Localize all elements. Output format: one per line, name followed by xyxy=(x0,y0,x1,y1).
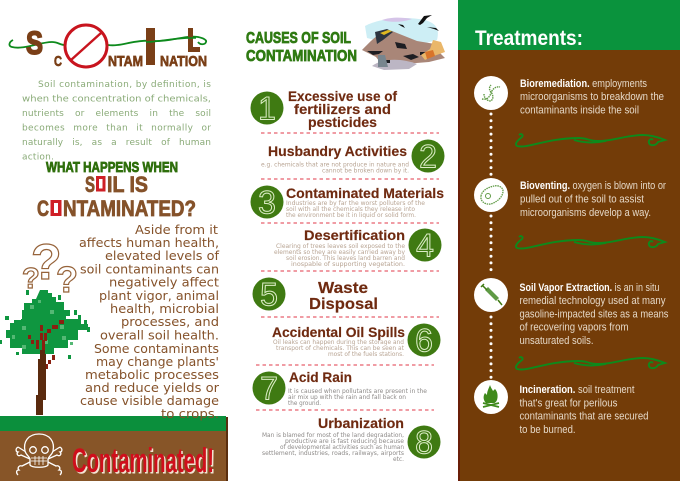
heading: what happens when soil is contaminated: S xyxy=(85,172,95,197)
treatment 4: incineration: that's great for perilous xyxy=(520,398,618,410)
banner: contaminated: Contaminated! xyxy=(74,444,216,481)
title: soil contamination: S xyxy=(26,25,43,61)
cause 8: urbanization: 8 xyxy=(415,424,433,460)
treatment 1: bioremediation: microorganisms to breakdown the xyxy=(520,91,664,103)
treatment 1: bioremediation xyxy=(474,76,664,116)
icon: question marks xyxy=(22,234,78,300)
title: soil contamination: NATION xyxy=(160,53,207,70)
treatment 4: incineration: Incineration. soil treatment xyxy=(520,384,635,396)
panel: soil contamination introduction xyxy=(0,25,228,481)
vine divider xyxy=(516,236,665,249)
text block: effects of contamination: negatively affect xyxy=(109,276,219,290)
cause 8: urbanization: Urbanization xyxy=(318,416,404,431)
cause 6: accidental oil spills: Oil leaks can happen during the storage and xyxy=(273,339,404,346)
treatment 1: bioremediation: contaminants inside the soil xyxy=(520,104,639,116)
text block: effects of contamination: plant vigor, animal xyxy=(99,289,219,303)
divider xyxy=(261,222,439,224)
treatment 4: incineration xyxy=(474,380,649,436)
icon: question marks: ? xyxy=(22,263,40,295)
cause 7: acid rain: Acid Rain xyxy=(289,370,352,385)
cause 6: accidental oil spills: most of the fuels stations. xyxy=(328,351,404,358)
text block: effects of contamination: may change plants' xyxy=(96,355,219,369)
illustration: polluted landfill xyxy=(362,15,445,70)
text block: effects of contamination: and reduce yields or xyxy=(85,381,219,395)
icon: question marks: ? xyxy=(56,259,78,300)
divider xyxy=(261,316,439,318)
treatment 3: soil vapor extraction xyxy=(474,278,668,347)
cause 8: urbanization xyxy=(262,416,440,463)
cause 3: contaminated materials: soil with all the chemicals they release into xyxy=(286,206,415,213)
text block: effects of contamination: cause visible damage xyxy=(80,394,219,408)
cause 1: fertilizers and pesticides: fertilizers and xyxy=(294,102,391,117)
icon: dna xyxy=(474,76,508,110)
vine divider xyxy=(516,357,665,370)
cause 7: acid rain: the ground. xyxy=(288,400,321,407)
cause 5: waste disposal xyxy=(252,276,378,313)
text block: effects of contamination: affects human health, xyxy=(79,236,219,250)
cause 7: acid rain: It is caused when pollutants are present in the xyxy=(288,388,427,395)
cause 2: husbandry activities: 2 xyxy=(419,138,437,174)
text block: effects of contamination: processes, and xyxy=(121,315,219,329)
cause 8: urbanization: settlement, industries, roads, railways, airports xyxy=(262,450,404,457)
cause 1: fertilizers and pesticides xyxy=(250,89,397,130)
text block: definition: Soil contamination, by definition, is xyxy=(38,80,211,90)
icon: syringe xyxy=(474,278,508,312)
text block: definition: becomes more than it normally or xyxy=(22,124,211,134)
cause 3: contaminated materials xyxy=(250,184,444,220)
heading: what happens when soil is contaminated: WHAT HAPPENS WHEN xyxy=(46,159,178,176)
cause 1: fertilizers and pesticides: 1 xyxy=(258,90,276,126)
heading: what happens when soil is contaminated: NTAMINATED? xyxy=(63,196,196,221)
cause 5: waste disposal: Disposal xyxy=(309,296,378,313)
treatment 3: soil vapor extraction: Soil Vapor Extraction. is an in situ xyxy=(520,282,660,294)
text block: effects of contamination: soil contaminants can xyxy=(80,262,219,276)
title: soil contamination: NTAM xyxy=(108,53,143,70)
dotted timeline xyxy=(490,114,492,378)
heading: causes xyxy=(246,30,357,65)
header band xyxy=(458,0,680,50)
heading: causes: CONTAMINATION xyxy=(246,48,357,65)
cause 3: contaminated materials: Industries are by far the worst polluters of the xyxy=(286,200,425,207)
cause 6: accidental oil spills: Accidental Oil Spills xyxy=(272,325,405,340)
treatment 4: incineration: contaminants that are secured xyxy=(520,410,649,422)
cause 5: waste disposal: Waste xyxy=(318,280,368,297)
treatment 2: bioventing: Bioventing. oxygen is blown into or xyxy=(520,180,666,192)
icon: campfire xyxy=(474,380,508,414)
text block: effects of contamination: health, microbial xyxy=(110,302,219,316)
divider xyxy=(261,270,439,272)
heading: what happens when soil is contaminated: IL IS xyxy=(107,172,148,197)
cause 6: accidental oil spills xyxy=(272,322,440,358)
treatment 3: soil vapor extraction: unsaturated soils. xyxy=(520,335,594,347)
text block: definition: action. xyxy=(22,152,54,162)
cause 7: acid rain xyxy=(252,370,427,407)
cause 4: desertification: elements so they are easily carried away by xyxy=(274,249,405,256)
banner: contaminated: Contaminated! xyxy=(72,442,214,480)
cause 7: acid rain: air mix up with the rain and fall back on xyxy=(288,394,406,401)
text block: definition: naturally is, as a result of human xyxy=(22,138,211,148)
text block: effects of contamination: Some contaminants xyxy=(94,342,219,356)
cause 3: contaminated materials: 3 xyxy=(258,184,276,220)
treatment 2: bioventing: pulled out of the soil to assist xyxy=(520,194,644,206)
cause 2: husbandry activities: e.g. chemicals that are not produce in nature and xyxy=(261,162,409,168)
cause 2: husbandry activities: Husbandry Activities xyxy=(268,144,407,159)
panel: treatments xyxy=(458,0,680,481)
text block: effects of contamination xyxy=(79,223,220,408)
treatment 3: soil vapor extraction: of recovering vapors from xyxy=(520,322,629,334)
text block: effects of contamination: metabolic processes xyxy=(85,368,219,382)
title: soil contamination xyxy=(9,25,207,70)
treatment 3: soil vapor extraction: remedial technology used at many xyxy=(520,295,666,307)
divider xyxy=(261,132,439,134)
icon: microorganism xyxy=(474,178,508,212)
treatment 2: bioventing: microorganisms develop a way. xyxy=(520,207,651,219)
text block: effects of contamination: Aside from it xyxy=(135,223,218,237)
divider xyxy=(256,364,434,366)
text block: effects of contamination: overall soil health. xyxy=(100,328,219,342)
cause 6: accidental oil spills: 6 xyxy=(415,322,433,358)
cause 7: acid rain: 7 xyxy=(260,370,278,406)
cause 4: desertification: soil erosion. This leaves land barren and xyxy=(286,255,405,262)
vine divider xyxy=(516,134,665,147)
cause 2: husbandry activities: cannot be broken down by it. xyxy=(322,168,409,174)
cause 8: urbanization: of developmental activities such as human xyxy=(280,444,404,451)
cause 8: urbanization: productive are is fast reducing because xyxy=(285,438,404,445)
treatment 2: bioventing xyxy=(474,178,666,219)
cause 8: urbanization: Man is blamed for most of the land degradation, xyxy=(262,432,404,439)
banner: contaminated xyxy=(0,417,228,481)
icon: question marks: ? xyxy=(31,234,62,290)
divider xyxy=(261,178,439,180)
cause 4: desertification: Clearing of trees leaves soil exposed to the xyxy=(276,243,405,250)
text: to crops: to crops. xyxy=(161,407,219,421)
cause 4: desertification: inospable of supporting vegetation. xyxy=(291,261,405,268)
heading: what happens when soil is contaminated: C xyxy=(37,196,49,221)
text block: definition: nutrients or elements in the soil xyxy=(22,109,211,119)
text block: definition: when the concentration of chemicals, xyxy=(22,94,211,104)
cause 1: fertilizers and pesticides: pesticides xyxy=(308,115,377,130)
cause 3: contaminated materials: Contaminated Materials xyxy=(286,186,444,201)
heading: causes: CAUSES OF SOIL xyxy=(246,30,351,47)
ground: green band xyxy=(0,416,226,431)
icon: pixel tree xyxy=(0,290,90,415)
cause 3: contaminated materials: the environment be it in liquid or solid form. xyxy=(286,212,416,219)
treatment 1: bioremediation: Bioremediation. employments xyxy=(520,78,647,90)
cause 6: accidental oil spills: transport of chemicals. This can be seen at xyxy=(276,345,405,352)
cause 4: desertification xyxy=(274,228,442,268)
title: soil contamination: C xyxy=(54,53,62,70)
text block: definition xyxy=(22,80,211,162)
cause 1: fertilizers and pesticides: Excessive use of xyxy=(288,89,397,104)
heading: treatments: Treatments: xyxy=(475,27,583,50)
divider xyxy=(256,409,434,411)
cause 5: waste disposal: 5 xyxy=(260,276,278,312)
cause 4: desertification: 4 xyxy=(416,228,434,264)
cause 8: urbanization: etc. xyxy=(393,456,404,463)
icon: skull and crossbones xyxy=(16,434,62,475)
panel: causes of soil contamination xyxy=(246,15,445,463)
text block: effects of contamination: elevated levels of xyxy=(105,249,220,263)
treatment 4: incineration: to be burned. xyxy=(520,424,576,436)
cause 4: desertification: Desertification xyxy=(304,228,405,243)
heading: what happens when soil is contaminated xyxy=(37,159,196,221)
cause 2: husbandry activities xyxy=(261,138,444,174)
